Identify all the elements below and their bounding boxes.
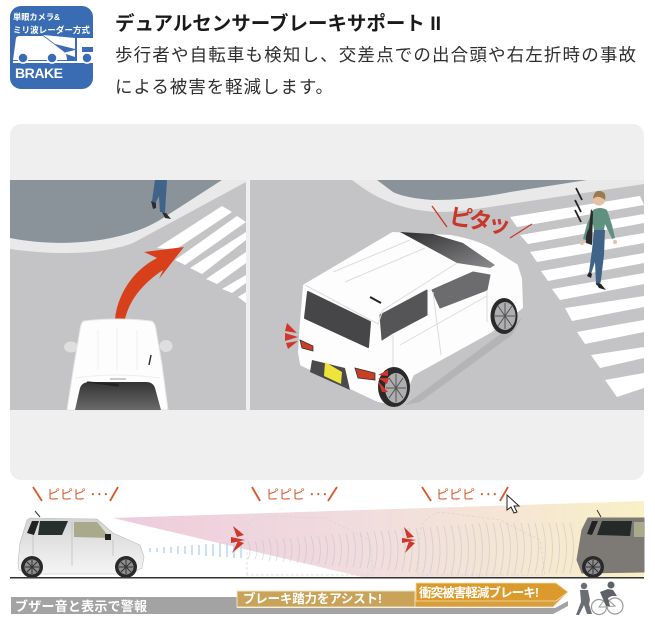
- sensor beam: [113, 501, 644, 577]
- arrow: brake assist stage: ブレーキ踏力をアシスト!: [243, 591, 382, 606]
- icon: mouse cursor: [507, 495, 519, 513]
- icon: brake badge: 単眼カメラ&: [13, 11, 60, 22]
- beep label 3: ピピピ ･･･: [436, 487, 498, 502]
- icon: pedestrian: [576, 583, 592, 615]
- car: stopped white car: [300, 232, 522, 407]
- beep label 2: ピピピ ･･･: [266, 487, 328, 502]
- arrow: turn direction: [115, 247, 184, 319]
- illustration: car stopped before pedestrian: [250, 180, 644, 410]
- arrow: buzzer warning stage: [11, 597, 568, 614]
- panel: intersection illustrations: [10, 124, 644, 480]
- arrow: collision mitigation brake stage: 衝突被害軽減ブレーキ!: [419, 585, 539, 600]
- car: silver car side view: [18, 511, 144, 578]
- pitatto sound effect: ピタッ: [447, 203, 513, 239]
- illustration: car turning right at crossing: [10, 180, 246, 410]
- description text: [115, 45, 636, 97]
- description text: による被害を軽減します。: [115, 77, 333, 97]
- title: デュアルセンサーブレーキサポート II: [115, 12, 441, 35]
- description text: 歩行者や自転車も検知し、交差点での出合頭や右左折時の事故: [115, 45, 636, 65]
- diagram: collision warning sequence: [10, 487, 644, 615]
- pitatto sound effect: [432, 203, 532, 239]
- arrow: buzzer warning stage: ブザー音と表示で警報: [15, 599, 147, 614]
- icon: brake badge: BRAKE: [15, 65, 63, 81]
- arrow: collision mitigation brake stage: [416, 583, 568, 601]
- crosswalk: [510, 196, 644, 397]
- car: grey car side view: [577, 510, 644, 578]
- car: rear top view: [64, 319, 172, 410]
- icon: brake badge: [10, 6, 93, 89]
- icon: brake badge: ミリ波レーダー方式: [13, 24, 90, 35]
- pedestrian legs: [151, 180, 171, 219]
- ultrasonic ripple arcs: [150, 523, 574, 577]
- ground line: [10, 577, 644, 578]
- beep label 1: ピピピ ･･･: [47, 487, 109, 502]
- ghost car outlines: [247, 512, 545, 575]
- arrow: brake assist stage: [237, 591, 568, 607]
- icon: brake light flashes: [285, 323, 389, 392]
- icon: cyclist: [592, 582, 623, 614]
- icons: warning flashes: [231, 526, 416, 553]
- pedestrian crossing: [575, 188, 617, 290]
